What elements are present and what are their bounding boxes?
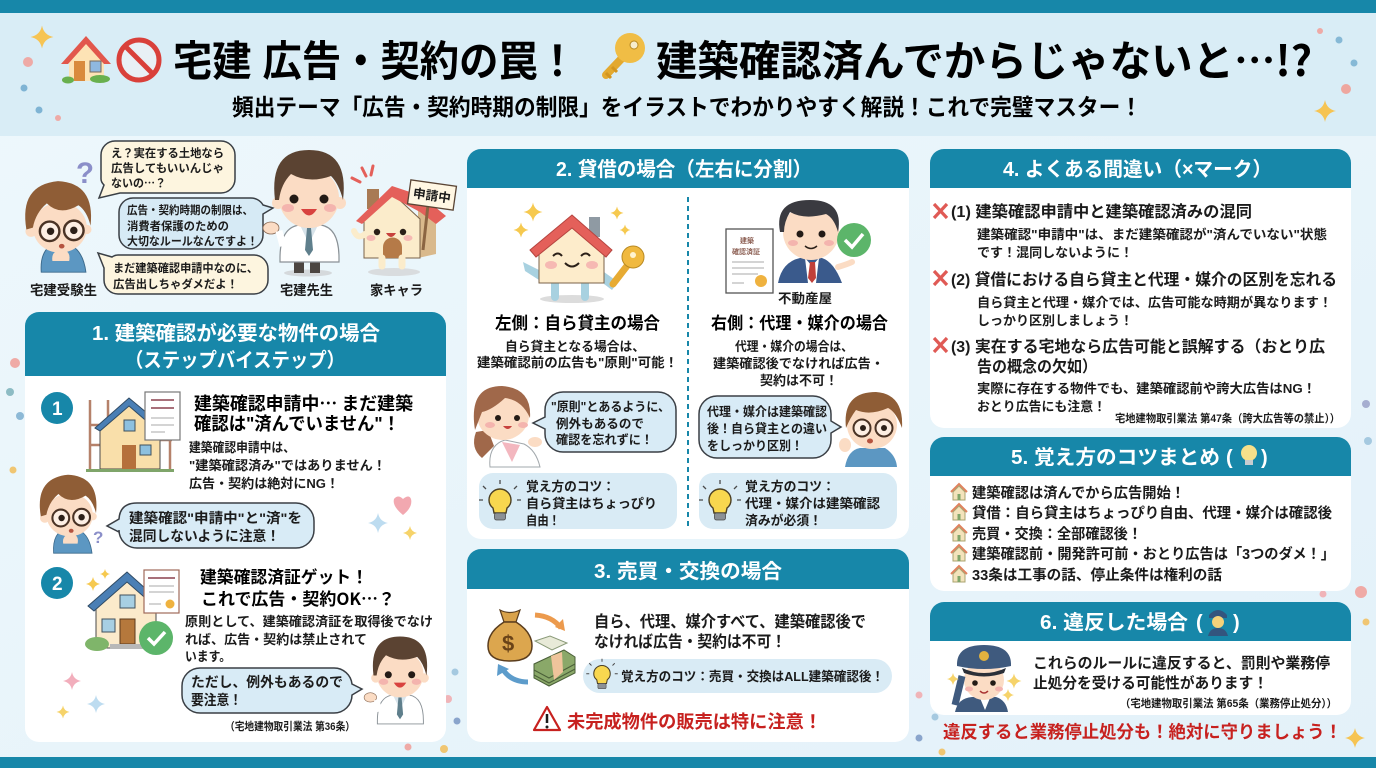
panel 6 text	[1033, 654, 1330, 692]
step 2 heading: 建築確認済証ゲット！	[200, 567, 368, 587]
title left: 宅建 広告・契約の罠！	[173, 38, 577, 85]
speech bubble: left: 確認を忘れずに！	[556, 432, 653, 447]
citation: article 47: 宅地建物取引業法 第47条（誇大広告等の禁止））	[1115, 411, 1340, 425]
step 2 badge: 2	[52, 574, 63, 595]
panel 3 heading: 3. 売買・交換の場合	[594, 560, 782, 583]
right column text: 代理・媒介の場合は、	[735, 339, 853, 354]
icon: prohibited sign	[119, 40, 159, 80]
speech bubble: student question: え？実在する土地なら	[111, 146, 224, 160]
icon: house with key	[514, 202, 644, 303]
panel 5 heading: (	[1226, 447, 1233, 469]
mistake 1: 建築確認"申請中"は、まだ建築確認が"済んでいない"状態	[977, 227, 1327, 242]
panel 6 heading: (	[1196, 612, 1203, 634]
step 1 text: "建築確認済み"ではありません！	[189, 458, 386, 473]
step 2 text: れば、広告・契約は禁止されて	[185, 632, 367, 647]
left column text: 建築確認前の広告も"原則"可能！	[477, 355, 678, 370]
mistake 3	[934, 337, 1325, 414]
step 1 heading: 建築確認申請中… まだ建築	[194, 390, 413, 416]
subtitle: 頻出テーマ「広告・契約時期の制限」をイラストでわかりやすく解説！これで完璧マスター！	[232, 94, 1142, 120]
panel 2 heading	[467, 149, 909, 188]
step 1 badge: 1	[52, 399, 63, 420]
icon: certificate: 建築	[740, 236, 754, 245]
panel 1 heading: （ステップバイステップ）	[125, 349, 345, 372]
tip: right: 覚え方のコツ：	[745, 479, 835, 494]
speech bubble: do not confuse	[107, 503, 314, 548]
character: house	[352, 166, 456, 298]
step 2 text: 原則として、建築確認済証を取得後でなけ	[185, 614, 433, 629]
step 2 heading: これで広告・契約OK…？	[201, 585, 395, 610]
margin dots	[6, 358, 1372, 756]
decoration: sparkles	[56, 672, 105, 718]
mistake 1: です！混同しないように！	[977, 245, 1133, 260]
panel 4 heading: 4. よくある間違い（×マーク）	[1003, 158, 1272, 181]
mistake 1	[934, 202, 1327, 260]
speech bubble: right: 後！自ら貸主との違い	[707, 421, 827, 436]
panel 3 text: なければ広告・契約は不可！	[594, 632, 786, 651]
step 1 badge	[41, 392, 73, 424]
tip: left: 覚え方のコツ：	[526, 479, 615, 494]
tip: left: 自由！	[526, 513, 560, 528]
right column text: 契約は不可！	[760, 373, 838, 388]
character: student small: ?	[93, 528, 103, 547]
citation: article 65: （宅地建物取引業法 第65条（業務停止処分））	[1120, 696, 1337, 710]
speech bubble: do not confuse: 建築確認"申請中"と"済"を	[129, 510, 302, 526]
title right: 建築確認済んでからじゃないと…!?	[656, 28, 1312, 89]
speech bubble: teacher explanation	[119, 198, 273, 249]
speech bubble: left	[533, 392, 676, 452]
step 2 badge	[41, 567, 73, 599]
tip: right: 代理・媒介は建築確認	[745, 496, 880, 511]
speech bubble: warning: 広告出しちゃダメだよ！	[113, 277, 238, 291]
character: police officer	[947, 645, 1022, 712]
character: teacher	[263, 150, 346, 298]
left column text	[477, 339, 678, 370]
panel 6 heading: )	[1233, 612, 1240, 634]
panel 3 text: 自ら、代理、媒介すべて、建築確認後で	[594, 612, 866, 631]
step 2 text: います。	[185, 649, 231, 664]
panel 5 heading: 5. 覚え方のコツまとめ	[1011, 446, 1220, 469]
mistake 3: (3) 実在する宅地なら広告可能と誤解する（おとり広	[951, 337, 1325, 356]
mistake 1: (1) 建築確認申請中と建築確認済みの混同	[951, 202, 1252, 221]
speech bubble: right: をしっかり区別！	[707, 439, 803, 453]
speech bubble: student question: ないの…？	[111, 175, 166, 191]
speech bubble: left: "原則"とあるように、	[551, 400, 670, 414]
tip list: 建築確認前・開発許可前・おとり広告は「3つのダメ！」	[972, 545, 1335, 563]
left column text: 自ら貸主となる場合は、	[505, 339, 645, 354]
speech bubble: warning: まだ建築確認申請中なのに、	[113, 261, 258, 275]
character: house: 家キャラ	[370, 282, 423, 298]
step 2 heading	[200, 567, 395, 610]
character: student: ?	[76, 157, 94, 190]
bottom bar	[0, 757, 1376, 768]
panel: 1 building confirmation	[25, 312, 446, 742]
character: female teacher	[474, 386, 542, 467]
panel 5 heading: )	[1261, 447, 1268, 469]
panel: 3 sale and exchange	[467, 549, 909, 742]
speech bubble: student question: 広告してもいいんじゃ	[111, 161, 224, 175]
step 1 text: 建築確認申請中は、	[189, 440, 295, 455]
character: realtor: 不動産屋	[778, 291, 832, 306]
speech bubble: teacher explanation: 消費者保護のための	[127, 219, 229, 233]
icon: check mark	[837, 223, 871, 257]
mistake 2	[934, 270, 1337, 328]
speech bubble: left: 例外もあるので	[556, 416, 644, 431]
speech bubble: right	[699, 396, 841, 458]
panel 6 heading	[930, 602, 1351, 641]
panel: 4 common mistakes	[930, 149, 1351, 428]
icon: house under construction	[86, 392, 180, 472]
panel 6 text: これらのルールに違反すると、罰則や業務停	[1033, 654, 1330, 672]
speech bubble: right: 代理・媒介は建築確認	[707, 404, 827, 419]
decoration: heart and sparkles	[368, 496, 417, 540]
character: teacher: 宅建先生	[280, 282, 333, 298]
mistake 2: (2) 貸借における自ら貸主と代理・媒介の区別を忘れる	[951, 270, 1337, 289]
step 1 text	[189, 440, 386, 491]
tip list: 売買・交換：全部確認後！	[972, 525, 1142, 543]
speech bubble: student question	[99, 141, 235, 198]
citation: article 36: （宅地建物取引業法 第36条）	[225, 719, 355, 733]
speech bubble: warning	[98, 253, 268, 294]
icon: certificate: 確認済証	[732, 247, 760, 256]
icon: money exchange	[488, 610, 575, 686]
character: realtor	[778, 200, 852, 306]
character: student: 宅建受験生	[30, 282, 97, 298]
header band	[0, 13, 1376, 136]
right column heading: 右側：代理・媒介の場合	[711, 314, 888, 333]
tip list: 33条は工事の話、停止条件は権利の話	[972, 566, 1222, 584]
tip: sale	[583, 659, 892, 693]
step 1 text: 広告・契約は絶対にNG！	[189, 476, 339, 491]
mistake 3: 実際に存在する物件でも、建築確認前や誇大広告はNG！	[977, 381, 1316, 396]
panel: 5 memory tips	[930, 437, 1351, 591]
step 1 heading: 確認は"済んでいません"！	[194, 414, 400, 434]
speech bubble: exceptions: ただし、例外もあるので	[191, 674, 343, 690]
top bar	[0, 0, 1376, 13]
panel 1 heading	[25, 312, 446, 376]
tip: left: 自ら貸主はちょっぴり	[526, 496, 657, 511]
panel: 2 lease	[467, 149, 909, 539]
panel 5 heading	[930, 437, 1351, 476]
panel 4 heading	[930, 149, 1351, 188]
tip: right: 済みが必須！	[745, 513, 822, 528]
icon: money exchange: $	[502, 631, 514, 656]
mistake 2: 自ら貸主と代理・媒介では、広告可能な時期が異なります！	[977, 295, 1332, 310]
left column heading: 左側：自ら貸主の場合	[495, 313, 660, 333]
speech bubble: exceptions	[182, 668, 362, 713]
speech bubble: exceptions: 要注意！	[191, 692, 242, 708]
right column text: 建築確認後でなければ広告・	[713, 356, 884, 371]
closing warning: 違反すると業務停止処分も！絶対に守りましょう！	[943, 722, 1342, 742]
mistake 3: おとり広告にも注意！	[977, 399, 1106, 414]
icon: house emoji	[61, 36, 111, 84]
step 1 heading	[194, 390, 413, 434]
mistake 3: 告の概念の欠如）	[977, 357, 1097, 376]
tip list: 建築確認は済んでから広告開始！	[972, 484, 1185, 502]
tip list	[951, 484, 1335, 584]
character: teacher small	[364, 637, 429, 724]
speech bubble: do not confuse: 混同しないように注意！	[129, 528, 280, 544]
speech bubble: teacher explanation: 広告・契約時期の制限は、	[127, 203, 253, 217]
character: house: 申請中	[412, 185, 452, 206]
panel: 6 violations	[930, 602, 1351, 715]
panel 1 heading: 1. 建築確認が必要な物件の場合	[92, 321, 380, 345]
character: student	[25, 157, 97, 298]
panel 6 text: 止処分を受ける可能性があります！	[1033, 674, 1268, 692]
character: student small	[40, 475, 103, 553]
character: student pointing	[839, 392, 902, 467]
panel 3 text	[594, 612, 866, 651]
tip: right	[699, 473, 897, 529]
right column text	[713, 339, 884, 388]
panel 6 heading: 6. 違反した場合	[1040, 611, 1188, 634]
panel 3 heading	[467, 549, 909, 589]
tip: left	[479, 473, 677, 529]
tip list: 貸借：自ら貸主はちょっぴり自由、代理・媒介は確認後	[972, 504, 1332, 522]
icon: certificate	[726, 229, 773, 293]
mistake 2: しっかり区別しましょう！	[977, 313, 1133, 328]
warning: 未完成物件の販売は特に注意！	[567, 711, 822, 732]
icon: key	[606, 33, 645, 78]
step 2 text	[185, 614, 433, 664]
speech bubble: teacher explanation: 大切なルールなんですよ！	[127, 234, 258, 248]
tip: sale: 覚え方のコツ：売買・交換はALL建築確認後！	[621, 669, 884, 684]
panel 2 heading: 2. 貸借の場合（左右に分割）	[556, 157, 812, 181]
icon: house with certificate	[85, 569, 179, 655]
